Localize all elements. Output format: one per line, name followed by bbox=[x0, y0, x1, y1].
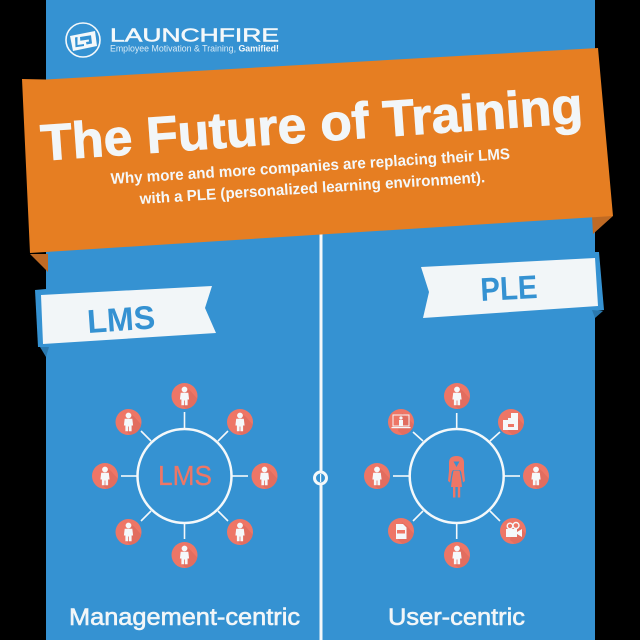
ribbon: LMS bbox=[35, 286, 216, 357]
tagline: Employee Motivation & Training, Gamified! bbox=[110, 44, 279, 54]
subtitle: with a PLE (personalized learning environment). bbox=[138, 169, 486, 208]
connectors bbox=[121, 412, 248, 539]
logo bbox=[66, 23, 279, 57]
subtitle: Why more and more companies are replacing their LMS bbox=[110, 146, 510, 188]
heading: Management-centric: Management-centric bbox=[69, 604, 300, 631]
icon: video camera bbox=[500, 518, 527, 545]
title banner bbox=[22, 48, 613, 272]
icon: central woman bbox=[448, 456, 465, 498]
banner fold left bbox=[30, 254, 48, 272]
diagram: PLE hub bbox=[364, 383, 550, 569]
icon: video lesson screen bbox=[388, 409, 415, 436]
hub circle bbox=[410, 429, 504, 523]
ribbon label: LMS bbox=[86, 298, 156, 340]
icon: puzzle bbox=[498, 409, 525, 436]
banner body bbox=[22, 48, 613, 253]
icon: people bbox=[92, 383, 278, 569]
icon: logo mark bbox=[66, 23, 100, 57]
hub circle bbox=[138, 429, 232, 523]
center divider bbox=[314, 234, 326, 640]
icon: people bbox=[364, 383, 550, 569]
ribbon: PLE bbox=[421, 252, 604, 318]
brand name: LAUNCHFIRE bbox=[110, 24, 279, 46]
connectors bbox=[393, 413, 520, 539]
icon: PDF file bbox=[388, 518, 415, 545]
subtitle bbox=[110, 146, 510, 208]
title: The Future of Training bbox=[39, 77, 584, 171]
hub label: LMS bbox=[158, 460, 212, 491]
diagram: LMS hub bbox=[92, 383, 278, 569]
ribbon label: PLE bbox=[479, 268, 538, 308]
banner fold right bbox=[592, 216, 613, 234]
heading: User-centric: User-centric bbox=[388, 604, 525, 631]
